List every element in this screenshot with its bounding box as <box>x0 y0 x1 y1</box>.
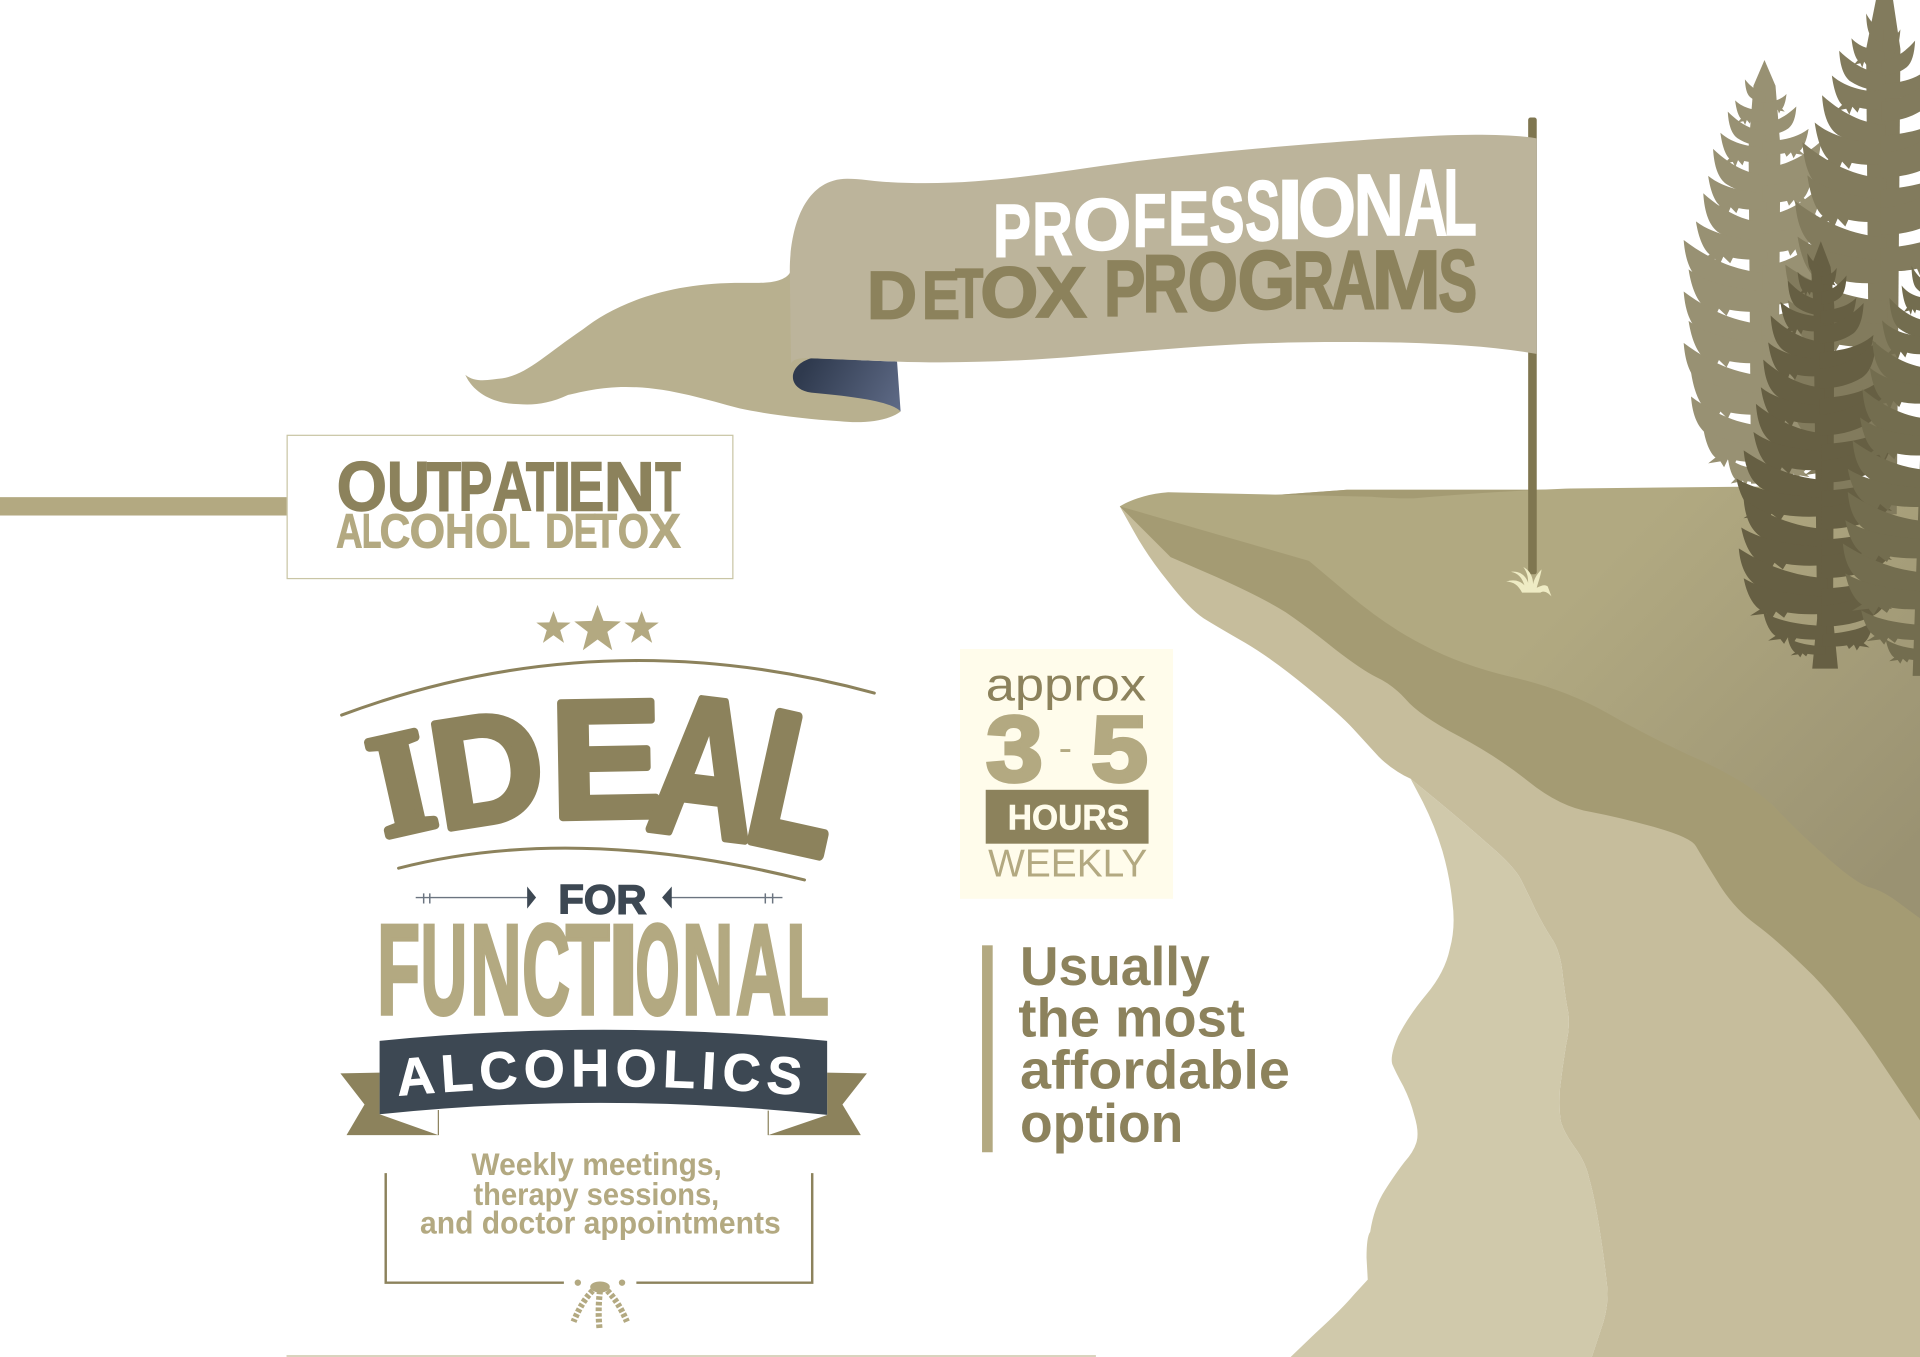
heading: ALCOHOL DETOX: H <box>445 505 474 558</box>
callout: most affordable option <box>982 935 1290 1154</box>
illustration: cliff <box>1120 485 1920 1357</box>
heading: ALCOHOL DETOX: A <box>336 505 362 558</box>
tree: front right <box>1843 208 1920 676</box>
callout text: Usually <box>1020 935 1210 997</box>
flag heading: PROFESSIONAL: R <box>1032 187 1073 271</box>
label block: HOURS <box>986 790 1149 844</box>
flag heading: PROFESSIONAL: E <box>1168 176 1209 262</box>
heading: OUTPATIENT: E <box>568 448 604 526</box>
callout text: the most <box>1018 987 1245 1049</box>
heading: OUTPATIENT: P <box>459 448 492 526</box>
heading: FUNCTIONAL: U <box>421 899 467 1042</box>
arrow: left pointing to FOR <box>416 887 536 909</box>
flag heading: PROFESSIONAL: L <box>1443 150 1477 255</box>
icon: grass tuft <box>1506 567 1551 596</box>
cliff top surface <box>1120 485 1920 918</box>
flag heading: PROFESSIONAL: P <box>993 189 1031 273</box>
heading: ALCOHOL DETOX: C <box>380 505 410 558</box>
cliff shaded band <box>1120 490 1920 1120</box>
label block: HOURS: HOURS <box>1008 797 1129 837</box>
text: approx: approx <box>986 658 1146 710</box>
cliff lower rock face <box>1120 490 1920 1357</box>
heading: ALCOHOL DETOX: O <box>410 505 445 558</box>
heading: ALCOHOL DETOX: T <box>594 505 617 558</box>
flag heading: DETOX PROGRAMS: M <box>1371 234 1441 327</box>
heading: IDEAL: L <box>733 672 861 895</box>
heading: IDEAL: E <box>549 666 663 854</box>
callout text: option <box>1020 1092 1183 1154</box>
flag heading: DETOX PROGRAMS: S <box>1438 231 1477 330</box>
number: 3-5: 5 <box>1091 697 1148 801</box>
heading: IDEAL <box>356 652 861 895</box>
flag heading: DETOX PROGRAMS: O <box>1188 235 1238 328</box>
flag heading: DETOX PROGRAMS: P <box>1104 244 1146 333</box>
tree: back right <box>1785 0 1920 514</box>
flag heading: DETOX PROGRAMS: A <box>1332 234 1375 327</box>
ribbon: main band <box>380 1030 827 1115</box>
heading: FUNCTIONAL: L <box>786 899 829 1042</box>
arrow: right pointing to FOR <box>662 887 782 909</box>
heading: FUNCTIONAL: A <box>736 899 786 1042</box>
flag heading: DETOX PROGRAMS: O <box>980 254 1038 333</box>
flag heading: PROFESSIONAL: A <box>1404 150 1447 255</box>
flag heading: PROFESSIONAL: S <box>1245 163 1280 259</box>
heading: ALCOHOL DETOX: E <box>574 505 598 558</box>
heading: FOR: FOR <box>558 876 647 922</box>
number: 3-5: - <box>1059 728 1072 769</box>
description text: Weekly meetings, <box>471 1146 722 1182</box>
flag heading: PROFESSIONAL: F <box>1133 179 1166 263</box>
heading: OUTPATIENT: U <box>387 448 430 526</box>
tree: front centre <box>1736 241 1898 669</box>
flag heading: PROFESSIONAL: S <box>1210 171 1245 259</box>
callout text: affordable <box>1020 1039 1290 1101</box>
heading: IDEAL: D <box>419 676 555 862</box>
heading: OUTPATIENT: T <box>655 448 681 526</box>
heading: FUNCTIONAL: O <box>636 899 680 1042</box>
flag heading: DETOX PROGRAMS: D <box>867 258 917 333</box>
heading: FUNCTIONAL: T <box>566 899 610 1042</box>
cliff light outcrop <box>1291 779 1608 1357</box>
heading: OUTPATIENT: I <box>552 448 572 526</box>
flag underside fold <box>793 358 901 411</box>
heading: ALCOHOL DETOX: O <box>475 505 508 558</box>
flag heading: PROFESSIONAL: I <box>1277 162 1304 256</box>
badge: ideal for functional alcoholics: ALCOHOLICS <box>398 1049 800 1096</box>
bracket frame <box>386 1173 812 1283</box>
heading: OUTPATIENT: T <box>427 448 461 526</box>
flag heading: PROFESSIONAL: O <box>1073 183 1131 266</box>
heading: OUTPATIENT: A <box>492 448 532 526</box>
heading: FUNCTIONAL: C <box>522 899 570 1042</box>
heading: FUNCTIONAL: N <box>682 899 733 1042</box>
ribbon: left tail <box>340 1073 438 1135</box>
ribbon: right tail <box>768 1073 867 1135</box>
heading: ALCOHOL DETOX: D <box>545 505 574 558</box>
callout text <box>1018 935 1290 1154</box>
badge: ideal for functional alcoholics <box>340 605 876 1328</box>
flag heading: DETOX PROGRAMS: E <box>922 258 960 333</box>
flag heading: PROFESSIONAL: O <box>1298 161 1356 254</box>
illustration: pine trees <box>1684 0 1920 676</box>
flag tail <box>465 269 901 422</box>
flag body <box>790 135 1536 363</box>
panel: outpatient alcohol detox title box <box>287 435 733 579</box>
flag heading: DETOX PROGRAMS: G <box>1237 234 1296 327</box>
description text <box>420 1146 781 1240</box>
icon: leaf ornament <box>574 1279 627 1330</box>
top arc <box>342 661 874 715</box>
flag pole <box>1528 118 1537 574</box>
flag heading: DETOX PROGRAMS: T <box>955 254 983 332</box>
flag heading: DETOX PROGRAMS: R <box>1142 239 1188 330</box>
heading: FUNCTIONAL: I <box>607 899 639 1042</box>
connector bar <box>0 497 287 516</box>
panel: hours per week <box>960 649 1173 899</box>
text: WEEKLY: WEEKLY <box>988 843 1147 886</box>
heading: IDEAL: A <box>640 652 771 883</box>
heading: FUNCTIONAL: F <box>377 899 420 1042</box>
heading: ALCOHOL DETOX: L <box>362 505 381 558</box>
lower arc <box>399 848 804 880</box>
description text: and doctor appointments <box>420 1204 781 1240</box>
heading: IDEAL: I <box>356 697 447 868</box>
flag heading: PROFESSIONAL: N <box>1354 157 1404 254</box>
description text: therapy sessions, <box>474 1176 719 1212</box>
heading: FUNCTIONAL: N <box>470 899 522 1042</box>
heading: ALCOHOL DETOX: X <box>649 505 681 558</box>
heading: ALCOHOLICS <box>398 1086 808 1096</box>
flag heading: DETOX PROGRAMS: R <box>1293 236 1334 327</box>
bottom divider <box>287 1355 1096 1357</box>
heading: ALCOHOL DETOX: L <box>508 505 530 558</box>
number: 3-5: 3 <box>986 697 1043 801</box>
tree: back left <box>1684 60 1832 486</box>
heading: ALCOHOL DETOX: O <box>618 505 649 558</box>
icon: three stars <box>536 605 659 650</box>
heading: OUTPATIENT: T <box>526 448 554 526</box>
heading: OUTPATIENT: O <box>337 448 387 526</box>
heading: OUTPATIENT: N <box>604 448 655 526</box>
flag heading: DETOX PROGRAMS: X <box>1036 254 1087 333</box>
